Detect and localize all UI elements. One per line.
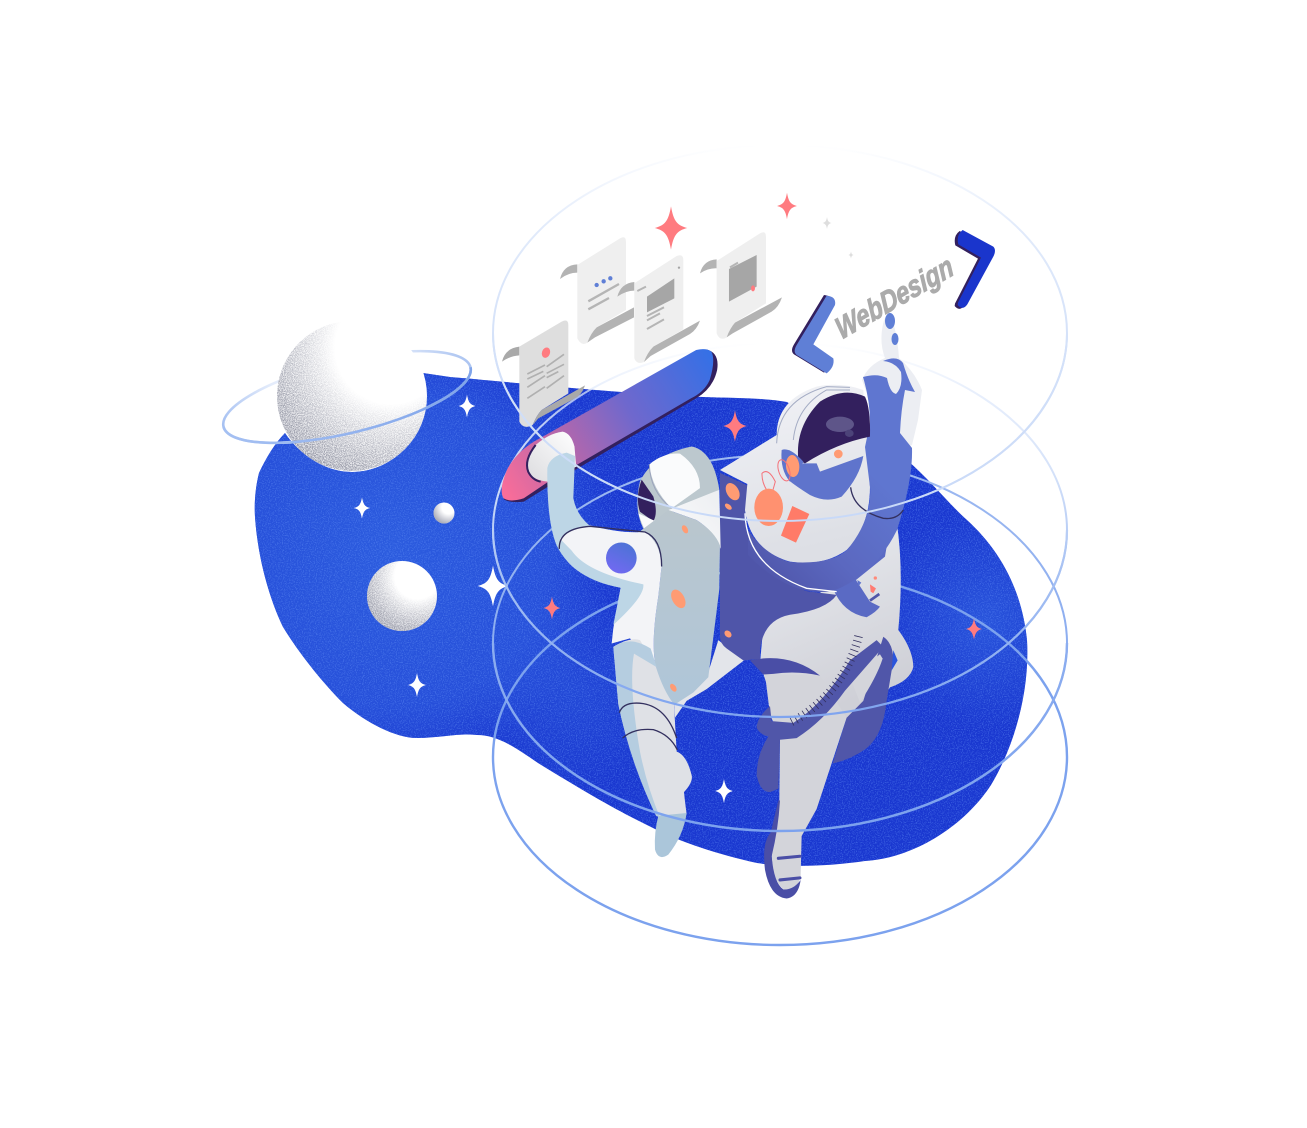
astronaut: glove xyxy=(862,314,922,448)
knee strap xyxy=(757,640,883,792)
chest and backpack top xyxy=(720,385,870,563)
backpack lower spot xyxy=(723,629,733,639)
scroll pill xyxy=(502,349,718,502)
WebDesign text: WebDesign xyxy=(831,250,958,347)
control panel arm xyxy=(833,547,887,617)
floating documents xyxy=(502,232,782,427)
astronaut: right figure lower body xyxy=(674,473,913,899)
blob background xyxy=(254,373,1028,866)
right bracket xyxy=(955,230,995,309)
backpack lower side xyxy=(674,640,744,718)
medium planet xyxy=(367,561,437,631)
left bracket xyxy=(792,295,835,373)
large planet xyxy=(277,321,427,471)
orange oval xyxy=(754,472,783,526)
visor xyxy=(638,480,656,521)
inner strap panel xyxy=(850,654,883,703)
torso xyxy=(760,522,913,718)
planet ring: back xyxy=(215,332,479,462)
document: image page xyxy=(617,255,700,363)
astronaut: left figure xyxy=(547,447,721,857)
orange spots xyxy=(668,524,689,693)
small planet xyxy=(434,502,454,524)
red rectangle xyxy=(781,506,809,543)
document: picture page xyxy=(700,232,782,339)
document: text page xyxy=(502,321,585,427)
white seam xyxy=(745,513,837,592)
boot stripes xyxy=(778,856,800,880)
coral stars xyxy=(543,193,982,640)
backpack xyxy=(637,510,720,705)
hose xyxy=(792,633,859,722)
backpack dark face xyxy=(720,473,837,660)
backpack spots xyxy=(723,481,743,511)
shoulder seam xyxy=(559,526,662,566)
rings: back arcs xyxy=(493,145,1067,945)
helmet line xyxy=(649,464,672,508)
leg pale strip xyxy=(613,641,660,817)
planet ring: front xyxy=(224,367,471,443)
visor xyxy=(798,393,870,463)
astronaut: arm and collar xyxy=(748,358,915,592)
face patch xyxy=(788,456,863,500)
helmet lines xyxy=(777,387,850,443)
patch circle xyxy=(606,542,637,574)
chin xyxy=(638,512,670,530)
neck cable xyxy=(851,487,903,519)
visor reflection xyxy=(826,417,854,437)
control panel xyxy=(857,576,879,601)
white stars xyxy=(354,395,733,803)
small blue behind hip xyxy=(892,650,898,671)
boot xyxy=(764,801,801,899)
orange dot xyxy=(834,450,843,458)
ear xyxy=(776,449,803,482)
lower back strap xyxy=(833,637,893,763)
shoulder and arm light xyxy=(559,525,662,671)
arm pale blue xyxy=(547,453,643,625)
grey stars xyxy=(822,217,854,259)
waist band xyxy=(750,658,820,676)
leg xyxy=(765,674,847,890)
astronaut: right figure details xyxy=(723,387,903,601)
finger marks xyxy=(885,313,898,345)
leg xyxy=(613,639,692,817)
document: dots page xyxy=(560,237,634,344)
astronaut: right figure chest and helmet xyxy=(720,385,887,617)
rings: front arcs xyxy=(493,333,1067,831)
foot xyxy=(655,813,687,857)
helmet inner xyxy=(649,454,700,508)
upper back xyxy=(668,490,721,549)
illustration: web design astronauts xyxy=(222,168,1068,946)
helmet shell xyxy=(637,447,719,529)
knee straps xyxy=(619,703,677,750)
